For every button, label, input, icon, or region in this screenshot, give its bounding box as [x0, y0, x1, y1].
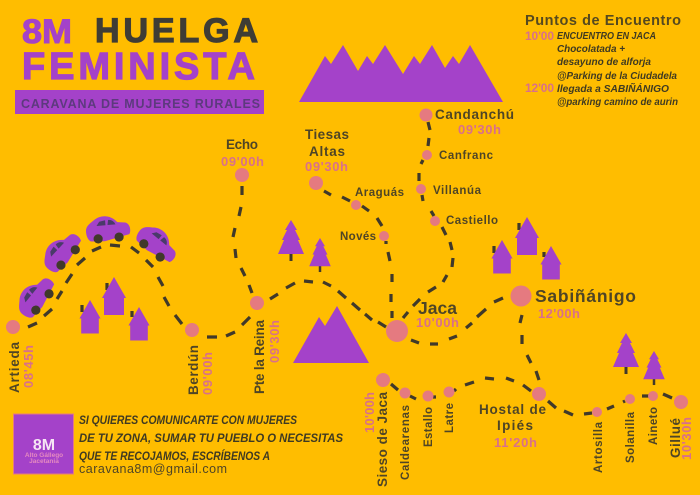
title	[22, 12, 258, 88]
meeting points text block: Chocolatada +	[557, 44, 625, 55]
icon: central trees	[278, 220, 331, 272]
label: Hostal de Ipiés	[479, 402, 546, 450]
label: Candanchú: Candanchú	[435, 107, 514, 122]
label: Jaca: 10'00h	[416, 315, 459, 330]
label: Berdún: 09'00h	[200, 352, 215, 395]
logo: 8M Alto Gállego Jacetania: 8M	[33, 437, 55, 454]
label: Gillué: Gillué	[668, 418, 683, 458]
label: Novés: Novés	[340, 231, 376, 243]
title: FEMINISTA	[22, 46, 255, 88]
label: Tiesas Altas: 09'30h	[305, 159, 348, 174]
route: dashed roads	[28, 122, 672, 415]
label: Pte la Reina: Pte la Reina	[252, 320, 267, 394]
label: Villanúa: Villanúa	[433, 185, 482, 197]
label: Artieda: 08'45h	[21, 345, 36, 388]
meeting points text block: desayuno de alforja	[557, 57, 651, 68]
label: Tiesas Altas	[305, 127, 349, 174]
contact text block: SI QUIERES COMUNICARTE CON MUJERES	[79, 415, 297, 427]
label: Aineto: Aineto	[648, 407, 660, 445]
meeting points text block: ENCUENTRO EN JACA	[557, 31, 656, 42]
label: Solanilla: Solanilla	[625, 411, 637, 463]
label: Tiesas Altas: Tiesas	[305, 127, 349, 142]
label: Hostal de Ipiés: 11'20h	[494, 435, 537, 450]
logo: 8M Alto Gállego Jacetania	[14, 414, 74, 474]
label: Candanchú	[435, 107, 514, 137]
label: Caldearenas: Caldearenas	[400, 405, 412, 480]
icon: central mountain	[293, 306, 369, 363]
label: Hostal de Ipiés: Hostal de	[479, 402, 546, 417]
logo: 8M Alto Gállego Jacetania: Alto Gállego	[25, 452, 63, 459]
label: Sieso de Jaca: 10'00h	[362, 392, 377, 433]
contact text block: DE TU ZONA, SUMAR TU PUEBLO O NECESITAS	[79, 433, 343, 445]
label: Candanchú: 09'30h	[458, 122, 501, 137]
title: HUELGA	[95, 12, 258, 50]
meeting points text block: 10'00	[525, 29, 554, 43]
logo: 8M Alto Gállego Jacetania: Jacetania	[29, 458, 59, 465]
icon: right village houses	[491, 217, 562, 279]
icon: top mountain range	[299, 45, 503, 102]
label: Tiesas Altas: Altas	[309, 144, 345, 159]
label: Echo: 09'00h	[221, 154, 264, 169]
label: Hostal de Ipiés: Ipiés	[497, 418, 533, 433]
label: Sabiñánigo: Sabiñánigo	[535, 286, 636, 306]
label: Berdún	[186, 345, 215, 395]
icon: right trees	[613, 333, 665, 385]
label: Canfranc: Canfranc	[439, 150, 494, 162]
icon: left village houses	[79, 277, 150, 340]
meeting points text block	[525, 13, 681, 108]
label: Jaca	[416, 298, 459, 330]
banner: caravana: CARAVANA DE MUJERES RURALES	[21, 97, 260, 111]
label: Castiello: Castiello	[446, 215, 498, 227]
meeting points text block: 12'00	[525, 81, 554, 95]
label: Jaca: Jaca	[418, 298, 457, 318]
label: Pte la Reina	[252, 320, 282, 394]
label: Sabiñánigo: 12'00h	[538, 306, 580, 321]
label: Latre: Latre	[444, 403, 456, 433]
label: Sieso de Jaca: Sieso de Jaca	[375, 392, 390, 487]
label: Berdún: Berdún	[186, 345, 201, 395]
icon: cars	[11, 214, 183, 322]
route stops	[6, 108, 688, 417]
label: Sabiñánigo	[535, 286, 636, 321]
meeting points text block: @Parking de la Ciudadela	[557, 71, 677, 82]
meeting points text block: Puntos de Encuentro	[525, 13, 681, 29]
label: Echo: Echo	[226, 137, 258, 152]
contact text block: caravana8m@gmail.com	[79, 462, 227, 476]
title: 8M	[22, 13, 72, 51]
label: Sieso de Jaca	[362, 392, 390, 487]
meeting points text block: @parking camino de aurin	[557, 97, 678, 108]
label: Gillué	[668, 417, 694, 460]
contact text block	[79, 415, 343, 476]
label: Pte la Reina: 09'30h	[267, 320, 282, 363]
banner: caravana	[15, 90, 264, 114]
label: Echo	[221, 137, 264, 169]
label: Estallo: Estallo	[423, 407, 435, 447]
label: Araguás: Araguás	[355, 187, 404, 199]
label: Artieda: Artieda	[7, 342, 22, 393]
meeting points text block: llegada a SABIÑÁNIGO	[557, 82, 669, 95]
label: Gillué: 10'30h	[679, 417, 694, 460]
label: Artosilla: Artosilla	[593, 421, 605, 473]
contact text block: QUE TE RECOJAMOS, ESCRÍBENOS A	[79, 450, 270, 463]
label: Artieda	[7, 342, 36, 393]
